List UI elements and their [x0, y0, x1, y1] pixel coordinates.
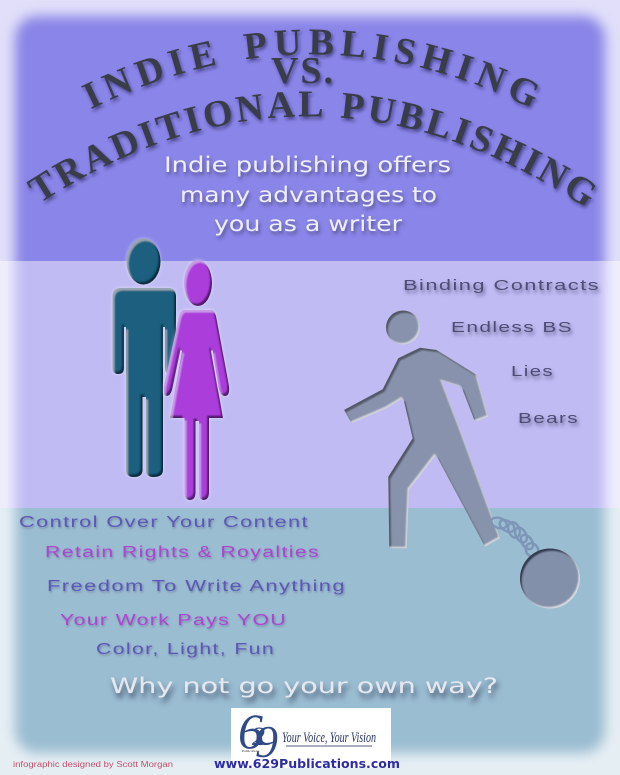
- intro text: you as a writer: [214, 212, 402, 236]
- title: VS.: [271, 50, 335, 92]
- icon: man figure: [112, 238, 176, 477]
- logo card: 9: [255, 716, 278, 767]
- intro text: [164, 153, 451, 236]
- list: drawbacks of traditional publishing: Binding Contracts: [403, 277, 600, 294]
- list: drawbacks of traditional publishing: Lies: [511, 363, 554, 380]
- logo card: Your Voice, Your Vision: [282, 730, 376, 746]
- call to action: Why not go your own way?: [110, 674, 498, 698]
- list: advantages of indie publishing: Control Over Your Content: [19, 514, 309, 531]
- title: TRADITIONAL PUBLISHING: [26, 92, 598, 210]
- icon: ball: [520, 548, 580, 608]
- list: advantages of indie publishing: [19, 514, 346, 658]
- list: drawbacks of traditional publishing: Endless BS: [451, 319, 573, 336]
- list: advantages of indie publishing: Color, Light, Fun: [96, 641, 275, 658]
- icon: chain links: [490, 516, 541, 559]
- icon: walking figure: [344, 310, 500, 548]
- list: advantages of indie publishing: Retain Rights & Royalties: [45, 544, 320, 561]
- title: INDIE PUBLISHING: [81, 29, 541, 112]
- logo card: [231, 703, 391, 768]
- intro text: Indie publishing offers: [164, 153, 451, 177]
- list: advantages of indie publishing: Your Work Pays YOU: [60, 612, 287, 629]
- list: drawbacks of traditional publishing: [403, 277, 600, 427]
- logo card: 2: [252, 722, 265, 751]
- icon: woman figure: [164, 260, 229, 500]
- list: advantages of indie publishing: Freedom To Write Anything: [47, 578, 346, 595]
- title: [26, 29, 598, 210]
- website url: www.629Publications.com: [214, 756, 400, 771]
- logo card: 6: [238, 703, 263, 759]
- designer credit: infographic designed by Scott Morgan: [13, 760, 173, 769]
- intro text: many advantages to: [180, 183, 437, 207]
- logo card: Publications: [242, 749, 260, 753]
- list: drawbacks of traditional publishing: Bears: [518, 410, 579, 427]
